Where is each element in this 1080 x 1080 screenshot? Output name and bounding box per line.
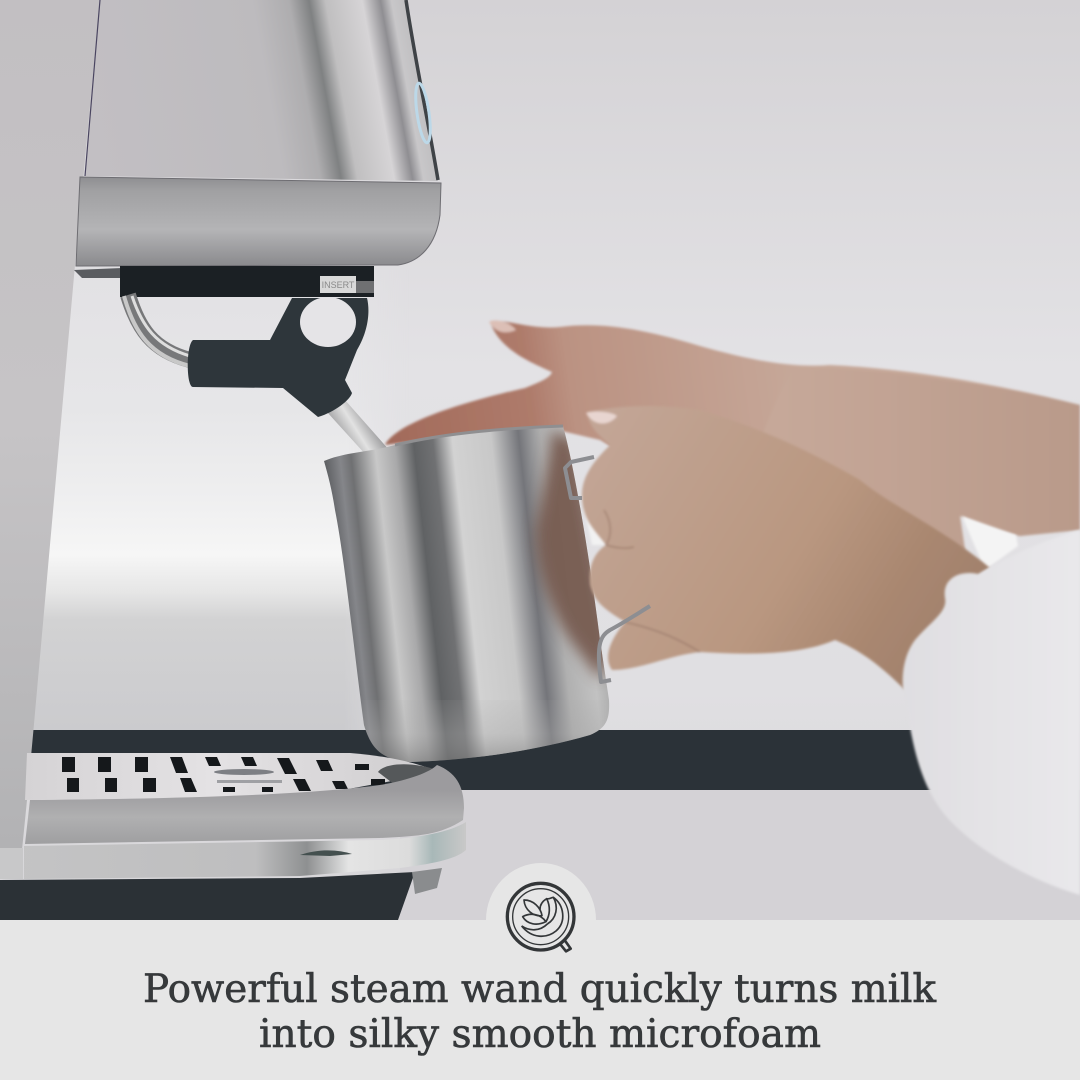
- steam wand tip: [327, 400, 390, 455]
- tray foot: [412, 868, 442, 894]
- caption text: into silky smooth microfoam: [259, 1012, 821, 1057]
- bright patch between arm and sleeve: [962, 516, 1018, 570]
- machine column: [0, 0, 100, 850]
- dark base: [0, 872, 415, 920]
- drip tray slots: [62, 757, 385, 792]
- jug handle wire: [565, 457, 650, 682]
- caption text: Powerful steam wand quickly turns milk: [143, 967, 936, 1012]
- fingernail back hand: [489, 320, 516, 332]
- steam arm metal tube: [124, 295, 190, 366]
- icon: latte art cup: [507, 883, 574, 951]
- brown hand reflection on jug: [535, 430, 612, 680]
- front hand holding the jug: [582, 406, 990, 690]
- icon badge: [486, 863, 596, 920]
- drip tray plate: [25, 753, 440, 800]
- back arm and hand: [385, 320, 1080, 550]
- caption panel: [0, 863, 1080, 1080]
- bright wall reflection left of the jug: [34, 436, 366, 730]
- rubber steam wand grip: [188, 297, 368, 417]
- left base: [0, 848, 23, 879]
- counter top: [400, 790, 1080, 920]
- front grey panel: [25, 765, 464, 844]
- sleeve: [903, 530, 1080, 895]
- machine head stainless: [85, 0, 438, 181]
- display ring on the machine: [413, 82, 433, 144]
- dark counter strip: [30, 730, 933, 790]
- fingernail front hand: [586, 412, 617, 424]
- cup rest shadow: [378, 764, 437, 785]
- reflection on chrome: [300, 850, 352, 856]
- jug rim: [395, 426, 563, 445]
- ring opening: [300, 297, 356, 347]
- machine head lower band: [76, 177, 441, 266]
- drip tray logo: [214, 769, 274, 775]
- group head: INSERT: [322, 280, 355, 290]
- group head: [74, 266, 374, 297]
- finger creases: [604, 510, 700, 652]
- drip tray: [0, 753, 466, 920]
- milk jug: [324, 426, 612, 762]
- chrome strip: [24, 822, 466, 879]
- bright gap between jug and fingers: [584, 508, 606, 545]
- insert label: [320, 276, 356, 293]
